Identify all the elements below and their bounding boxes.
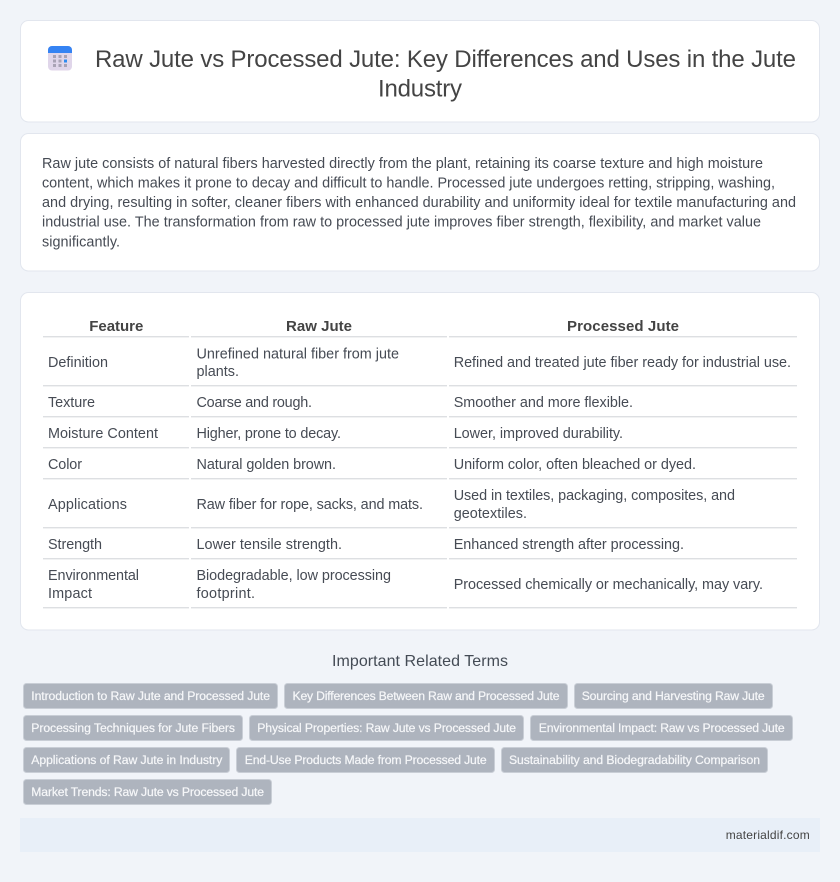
row: color: Uniform color, often bleached or dyed. [454,457,696,473]
row: environmental impact: Biodegradable, low processing [196,568,391,584]
tag [24,716,242,740]
tag: Key Differences Between Raw and Processed Jute [292,689,560,703]
row: applications: geotextiles. [454,506,527,522]
row: definition: Refined and treated jute fiber ready for industrial use. [454,355,791,371]
row: color [48,457,696,473]
row: environmental impact [48,568,763,602]
row: applications: Raw fiber for rope, sacks, and mats. [196,497,423,513]
panel: comparison table [20,292,820,630]
row: strength: Lower tensile strength. [196,537,342,553]
row: applications: Applications [48,497,127,513]
tag: End-Use Products Made from Processed Jute [245,753,487,767]
row: texture [48,395,633,411]
tag: Market Trends: Raw Jute vs Processed Jute [31,785,264,799]
row: strength: Strength [48,537,102,553]
tag [24,780,272,804]
table header row: Processed Jute [567,318,679,335]
row: moisture content: Moisture Content [48,426,158,442]
row: definition: plants. [196,364,239,380]
tag [24,748,230,772]
row: definition [48,346,791,380]
panel: introduction [20,134,820,271]
row: environmental impact: footprint. [196,586,255,602]
tag: Sourcing and Harvesting Raw Jute [582,689,765,703]
row: applications: Used in textiles, packaging, composites, and [454,488,735,504]
row: definition: Unrefined natural fiber from jute [196,346,399,362]
row: color: Natural golden brown. [196,457,336,473]
text block: introduction paragraph: industrial use. The transformation from raw to processed jute improves fiber strength, flexibility, and market value [42,214,761,230]
text block: introduction paragraph: content, which makes it prone to decay and difficult to handle. Processed jute undergoes retting, stripping, washing, [42,176,775,192]
row: environmental impact: Processed chemically or mechanically, may vary. [454,577,763,593]
table header row: Raw Jute [286,318,352,335]
row: moisture content [48,426,623,442]
row: texture: Smoother and more flexible. [454,395,633,411]
row: definition: Definition [48,355,108,371]
table header row [89,318,679,335]
table header row: Feature [89,318,143,335]
tag [236,748,494,772]
tag: Processing Techniques for Jute Fibers [31,721,235,735]
tag: Introduction to Raw Jute and Processed Jute [31,689,270,703]
tag: Sustainability and Biodegradability Comparison [509,753,760,767]
row: strength [48,537,684,553]
row: color: Color [48,457,82,473]
text block: introduction paragraph: significantly. [42,234,120,250]
heading: important related terms: Important Related Terms [332,653,508,670]
tag [284,684,568,708]
row: strength: Enhanced strength after processing. [454,537,684,553]
row: moisture content: Lower, improved durability. [454,426,623,442]
footer text: site name: materialdif.com [726,828,810,842]
text block: introduction paragraph [42,156,796,250]
tag: Physical Properties: Raw Jute vs Processed Jute [257,721,516,735]
title: Raw Jute vs Processed Jute: Key Differences and Uses in the Jute [95,46,796,73]
row: texture: Texture [48,395,95,411]
text block: introduction paragraph: and drying, resulting in softer, cleaner fibers with enhanced durability and uniformity ideal for textile manufacturing and [42,195,796,211]
footer [20,818,820,852]
row: applications [48,488,735,522]
row: texture: Coarse and rough. [196,395,312,411]
tag: Applications of Raw Jute in Industry [31,753,223,767]
tag [502,748,768,772]
tag [24,684,278,708]
tag [250,716,524,740]
row: moisture content: Higher, prone to decay. [196,426,341,442]
title: Industry [378,76,462,102]
row: environmental impact: Impact [48,586,92,602]
title [95,46,796,102]
panel: header [20,20,820,122]
text block: introduction paragraph: Raw jute consists of natural fibers harvested directly from the plant, retaining its coarse texture and high moisture [42,156,763,172]
tag list [24,684,792,804]
tag [530,716,792,740]
tag [574,684,772,708]
tag: Environmental Impact: Raw vs Processed Jute [539,721,785,735]
row: environmental impact: Environmental [48,568,139,584]
icon: calendar [48,46,72,70]
